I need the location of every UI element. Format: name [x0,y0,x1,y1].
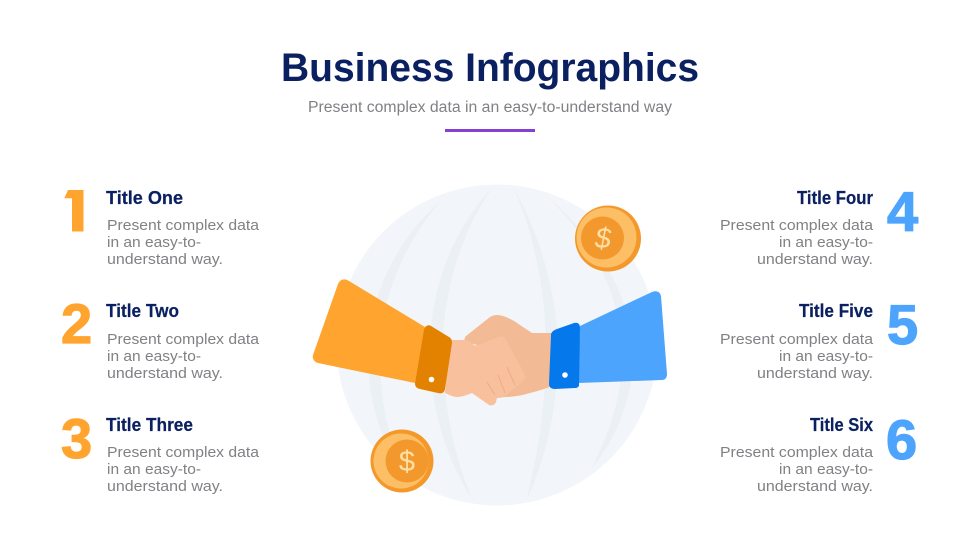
top coin [575,206,641,272]
item 5: Title Five [799,301,873,321]
finger lines [487,367,515,395]
item 4: 4 [887,180,918,243]
item 5: Present complex data [720,332,874,348]
item 5: understand way. [757,366,873,382]
top coin: $ [594,223,612,255]
item 1: in an easy-to- [107,235,201,251]
item 3 [61,407,260,495]
right hand [464,315,552,398]
bottom coin: $ [399,446,415,478]
globe [336,184,658,506]
item 4: in an easy-to- [779,235,873,251]
item 6: Present complex data [720,445,874,461]
right cuff button [562,372,568,378]
right sleeve [578,291,667,383]
left cuff button [429,377,434,382]
item 2: in an easy-to- [107,349,201,365]
item 2 [61,292,260,382]
item 6 [720,408,917,495]
right cuff [549,323,580,389]
item 4: understand way. [757,252,873,268]
item 1: 1 [0,175,140,247]
item 5 [720,293,918,382]
item 4: Title Four [797,188,873,208]
accent divider [445,129,535,132]
left cuff [415,325,452,393]
item 2: Title Two [106,301,179,321]
item 3: Title Three [106,415,193,435]
item 2: 2 [61,292,92,355]
item 6: understand way. [757,479,873,495]
item 6: Title Six [810,415,873,435]
item 3: Present complex data [107,445,260,461]
item 3: 3 [61,407,92,470]
item 5: 5 [887,293,918,356]
title: Business Infographics [281,46,699,90]
item 3: understand way. [107,479,223,495]
item 4 [720,180,918,268]
item 6: 6 [886,408,917,471]
bottom coin [370,430,434,492]
central illustration: handshake on globe [313,184,667,506]
item 1: understand way. [107,252,223,268]
item 2: Present complex data [107,332,260,348]
item 1 [64,190,259,267]
item 6: in an easy-to- [779,462,873,478]
item 3: in an easy-to- [107,462,201,478]
left sleeve [313,279,425,383]
item 2: understand way. [107,366,223,382]
item 4: Present complex data [720,218,874,234]
subtitle: Present complex data in an easy-to-understand way [308,99,672,116]
left hand [445,336,525,405]
item 5: in an easy-to- [779,349,873,365]
item 1: Title One [106,188,183,208]
item 1: Present complex data [107,218,260,234]
